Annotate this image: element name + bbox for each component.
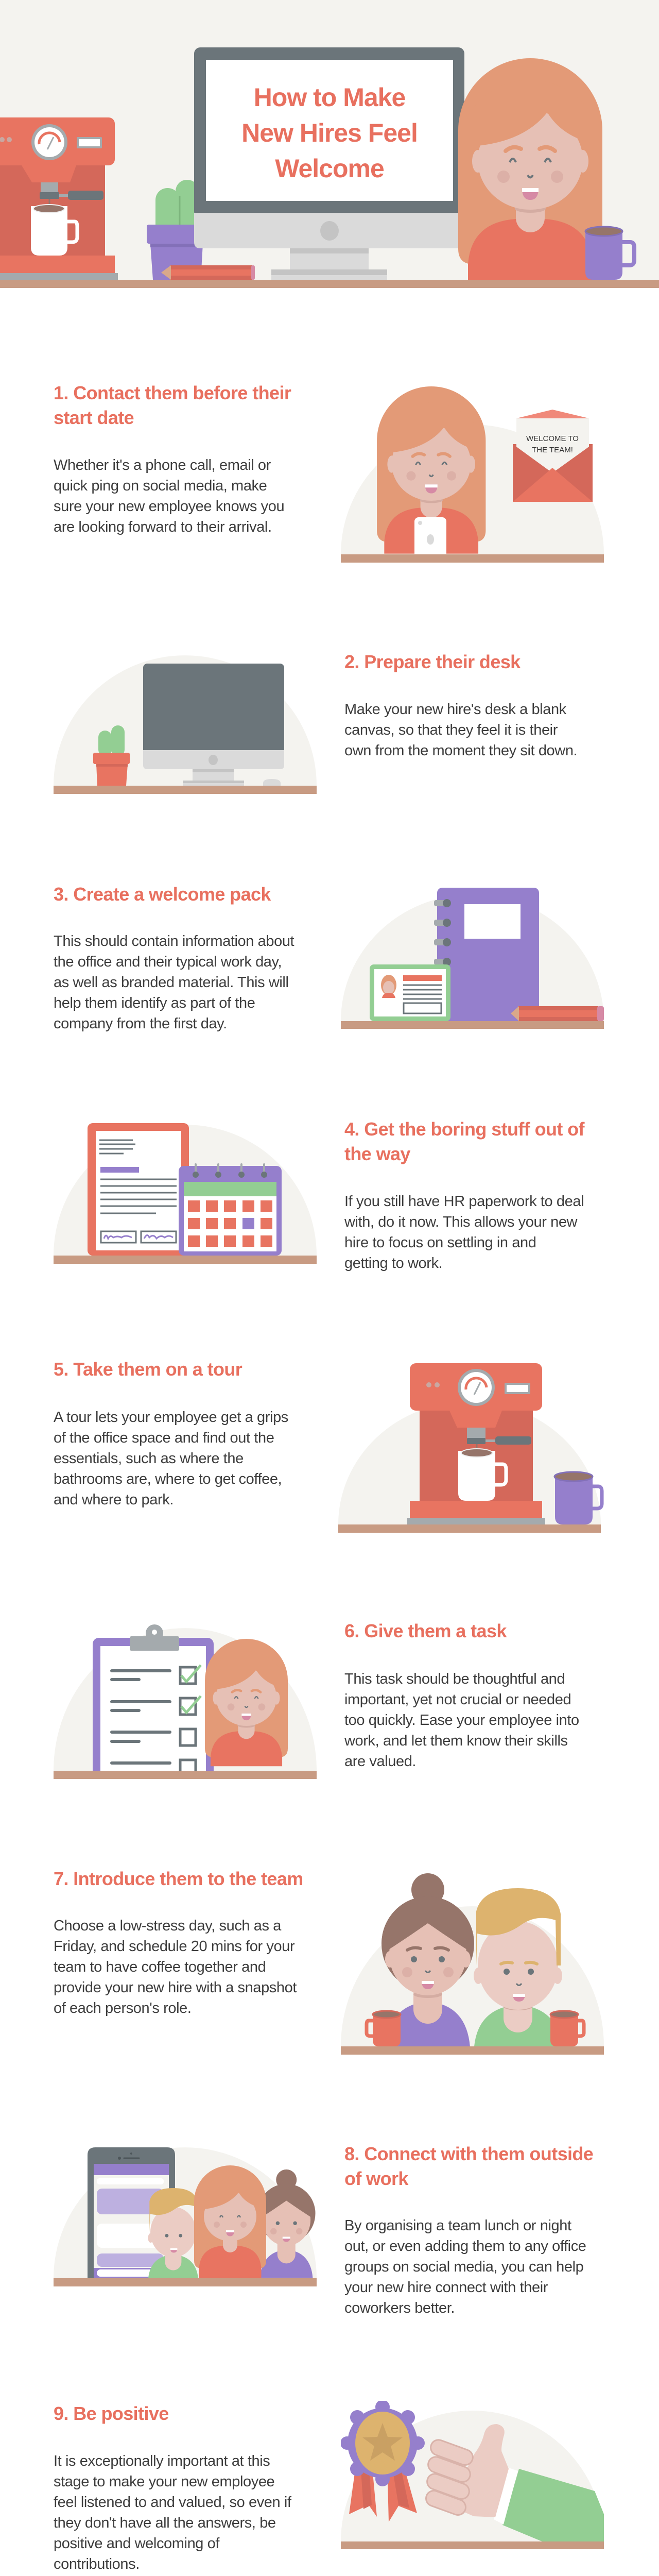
section 1 text: quick ping on social media, make — [54, 478, 267, 494]
cactus — [93, 725, 130, 786]
section 7 text: of each person's role. — [54, 2000, 192, 2016]
icon: smiling woman — [458, 58, 602, 280]
section 7 illustration: team with coffee — [341, 1873, 604, 2055]
section 3 text: help them identify as part of the — [54, 995, 255, 1011]
section 9 text: stage to make your new employee — [54, 2473, 274, 2490]
section 4 heading — [344, 1118, 585, 1164]
section 8 heading: of work — [344, 2168, 408, 2189]
section 1 illustration: woman with phone and envelope — [341, 386, 604, 563]
section 8 text: out, or even adding them to any office — [344, 2238, 586, 2255]
section 3 text: as well as branded material. This will — [54, 974, 289, 991]
section 8 text: your new hire connect with their — [344, 2279, 548, 2296]
woman with bun — [257, 2170, 315, 2278]
section 7 text: provide your new hire with a snapshot — [54, 1979, 297, 1996]
section 1 heading — [54, 382, 291, 428]
section 6 heading: 6. Give them a task — [344, 1620, 507, 1641]
woman with bun — [381, 1873, 474, 2047]
section 3 text: the office and their typical work day, — [54, 954, 282, 970]
woman with red hair — [194, 2165, 266, 2279]
title: New Hires Feel — [241, 118, 418, 147]
section 1 heading: 1. Contact them before their — [54, 382, 291, 403]
blond man — [148, 2188, 198, 2278]
HR form clipboard — [88, 1123, 189, 1256]
section 7 heading: 7. Introduce them to the team — [54, 1868, 303, 1889]
header scene — [0, 0, 659, 288]
section 2 text: canvas, so that they feel it is their — [344, 722, 558, 738]
section 4 heading: the way — [344, 1143, 410, 1164]
section 5 illustration: coffee machine — [338, 1363, 603, 1533]
thumbs up hand with green sleeve — [424, 2424, 604, 2541]
section 8 text: coworkers better. — [344, 2300, 455, 2316]
section 8 text: By organising a team lunch or night — [344, 2217, 571, 2234]
section 9 text — [54, 2453, 291, 2572]
icon: coffee machine — [0, 117, 118, 280]
section 4 illustration: paperwork and calendar — [54, 1123, 317, 1264]
section 8 heading — [344, 2143, 593, 2189]
envelope with welcome letter: THE TEAM! — [532, 446, 573, 454]
coffee machine — [407, 1363, 545, 1524]
section 9 text: positive and welcoming of — [54, 2535, 219, 2552]
section 9 illustration: medal and thumbs up — [341, 2401, 604, 2549]
section 5 text: A tour lets your employee get a grips — [54, 1409, 288, 1426]
section 6 text: important, yet not crucial or needed — [344, 1691, 571, 1708]
section 4 text: with, do it now. This allows your new — [344, 1214, 577, 1230]
section 2 illustration: desk with monitor — [54, 655, 317, 794]
purple mug — [554, 1472, 602, 1524]
title: How to Make — [254, 83, 405, 112]
phone — [414, 517, 446, 558]
section 3 text: This should contain information about — [54, 933, 294, 950]
section 8 heading: 8. Connect with them outside — [344, 2143, 593, 2164]
title: Welcome — [275, 154, 384, 183]
section 6 text — [344, 1671, 579, 1770]
section 8 illustration: phone and coworkers — [54, 2147, 317, 2286]
section 9 heading: 9. Be positive — [54, 2403, 169, 2424]
medal with ribbons — [340, 2400, 425, 2522]
icon: pencil — [161, 265, 255, 280]
section 4 text: hire to focus on settling in and — [344, 1234, 536, 1251]
section 7 text — [54, 1918, 297, 2016]
section 6 text: This task should be thoughtful and — [344, 1671, 565, 1687]
section 5 heading: 5. Take them on a tour — [54, 1359, 242, 1380]
calendar — [179, 1164, 282, 1256]
icon: cactus — [147, 180, 207, 280]
section 7 text: team to have coffee together and — [54, 1959, 266, 1975]
section 5 text: of the office space and find out the — [54, 1430, 274, 1446]
section 4 heading: 4. Get the boring stuff out of — [344, 1118, 584, 1140]
section 1 text: sure your new employee knows you — [54, 498, 284, 515]
section 3 heading: 3. Create a welcome pack — [54, 884, 271, 905]
section 4 text — [344, 1193, 584, 1272]
envelope with welcome letter: WELCOME TO — [526, 434, 579, 443]
section 2 text — [344, 701, 577, 759]
section 9 text: feel listened to and valued, so even if — [54, 2494, 291, 2511]
section 2 heading: 2. Prepare their desk — [344, 651, 521, 672]
section 3 illustration: welcome pack — [341, 888, 604, 1029]
section 3 text: company from the first day. — [54, 1015, 227, 1032]
ID card — [370, 964, 450, 1021]
section 6 text: too quickly. Ease your employee into — [344, 1712, 579, 1728]
section 4 text: getting to work. — [344, 1255, 442, 1272]
woman — [205, 1639, 288, 1766]
section 5 text: essentials, such as where the — [54, 1450, 244, 1467]
section 6 text: work, and let them know their skills — [344, 1733, 568, 1749]
section 1 text: Whether it's a phone call, email or — [54, 457, 271, 473]
section 1 heading: start date — [54, 407, 134, 428]
section 2 text: own from the moment they sit down. — [344, 742, 577, 759]
blond man — [474, 1888, 562, 2046]
monitor — [143, 664, 284, 786]
coffee mugs — [367, 2011, 584, 2046]
checklist clipboard — [93, 1624, 214, 1777]
title — [241, 83, 418, 183]
woman — [377, 386, 485, 554]
section 9 text: they don't have all the answers, be — [54, 2515, 276, 2531]
mouse — [263, 779, 281, 786]
section 2 text: Make your new hire's desk a blank — [344, 701, 566, 718]
pencil — [511, 1006, 604, 1021]
section 5 text — [54, 1409, 288, 1508]
section 7 text: Choose a low-stress day, such as a — [54, 1918, 281, 1934]
section 1 text: are looking forward to their arrival. — [54, 519, 272, 535]
section 3 text — [54, 933, 294, 1032]
section 5 text: bathrooms are, where to get coffee, — [54, 1471, 282, 1487]
envelope with welcome letter — [513, 410, 593, 502]
section 4 text: If you still have HR paperwork to deal — [344, 1193, 584, 1210]
binder — [434, 888, 539, 1021]
section 1 text — [54, 457, 284, 535]
icon: monitor — [194, 47, 464, 280]
icon: purple mug — [585, 227, 634, 280]
section 8 text: groups on social media, you can help — [344, 2259, 583, 2275]
section 7 text: Friday, and schedule 20 mins for your — [54, 1938, 294, 1955]
section 8 text — [344, 2217, 586, 2316]
section 9 text: It is exceptionally important at this — [54, 2453, 270, 2469]
section 6 illustration: task checklist — [54, 1624, 317, 1779]
section 6 text: are valued. — [344, 1753, 416, 1770]
phone with chat — [88, 2147, 175, 2278]
section 5 text: and where to park. — [54, 1492, 174, 1508]
section 9 text: contributions. — [54, 2556, 140, 2572]
